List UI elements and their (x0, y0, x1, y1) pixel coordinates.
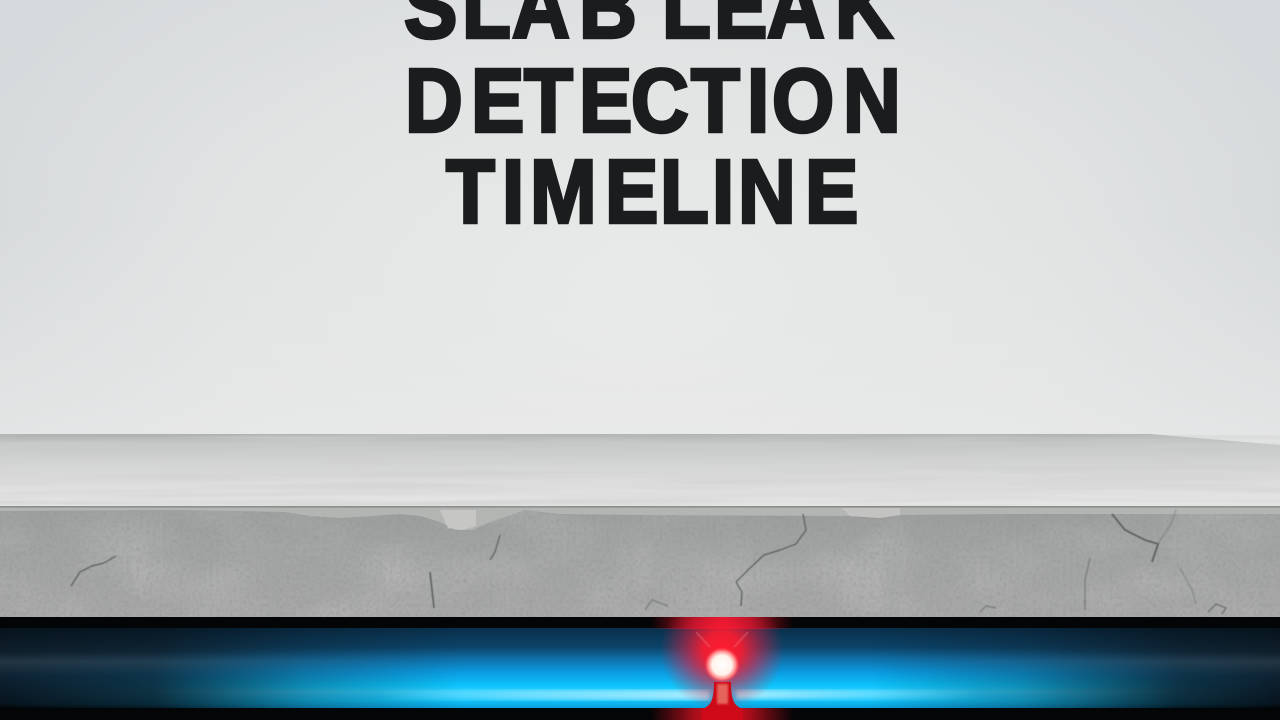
water pipe glow (0, 628, 1280, 708)
background wall (0, 0, 1280, 446)
cracks (71, 510, 1226, 614)
red glow (652, 617, 792, 720)
slab front face (0, 506, 1280, 617)
title (404, 0, 901, 243)
crack sparks (696, 632, 748, 647)
bright water highlight (380, 690, 976, 700)
leak stem (702, 682, 743, 720)
title line: timeline: TIMELINE (446, 142, 858, 243)
glowing core (704, 647, 740, 683)
title line: detection: DETECTION (405, 51, 901, 152)
slab top surface (0, 434, 1280, 507)
leak point (652, 617, 792, 720)
concrete slab (0, 434, 1280, 617)
chipped top edge (0, 507, 1280, 530)
pipe channel dark backing (0, 617, 1280, 720)
